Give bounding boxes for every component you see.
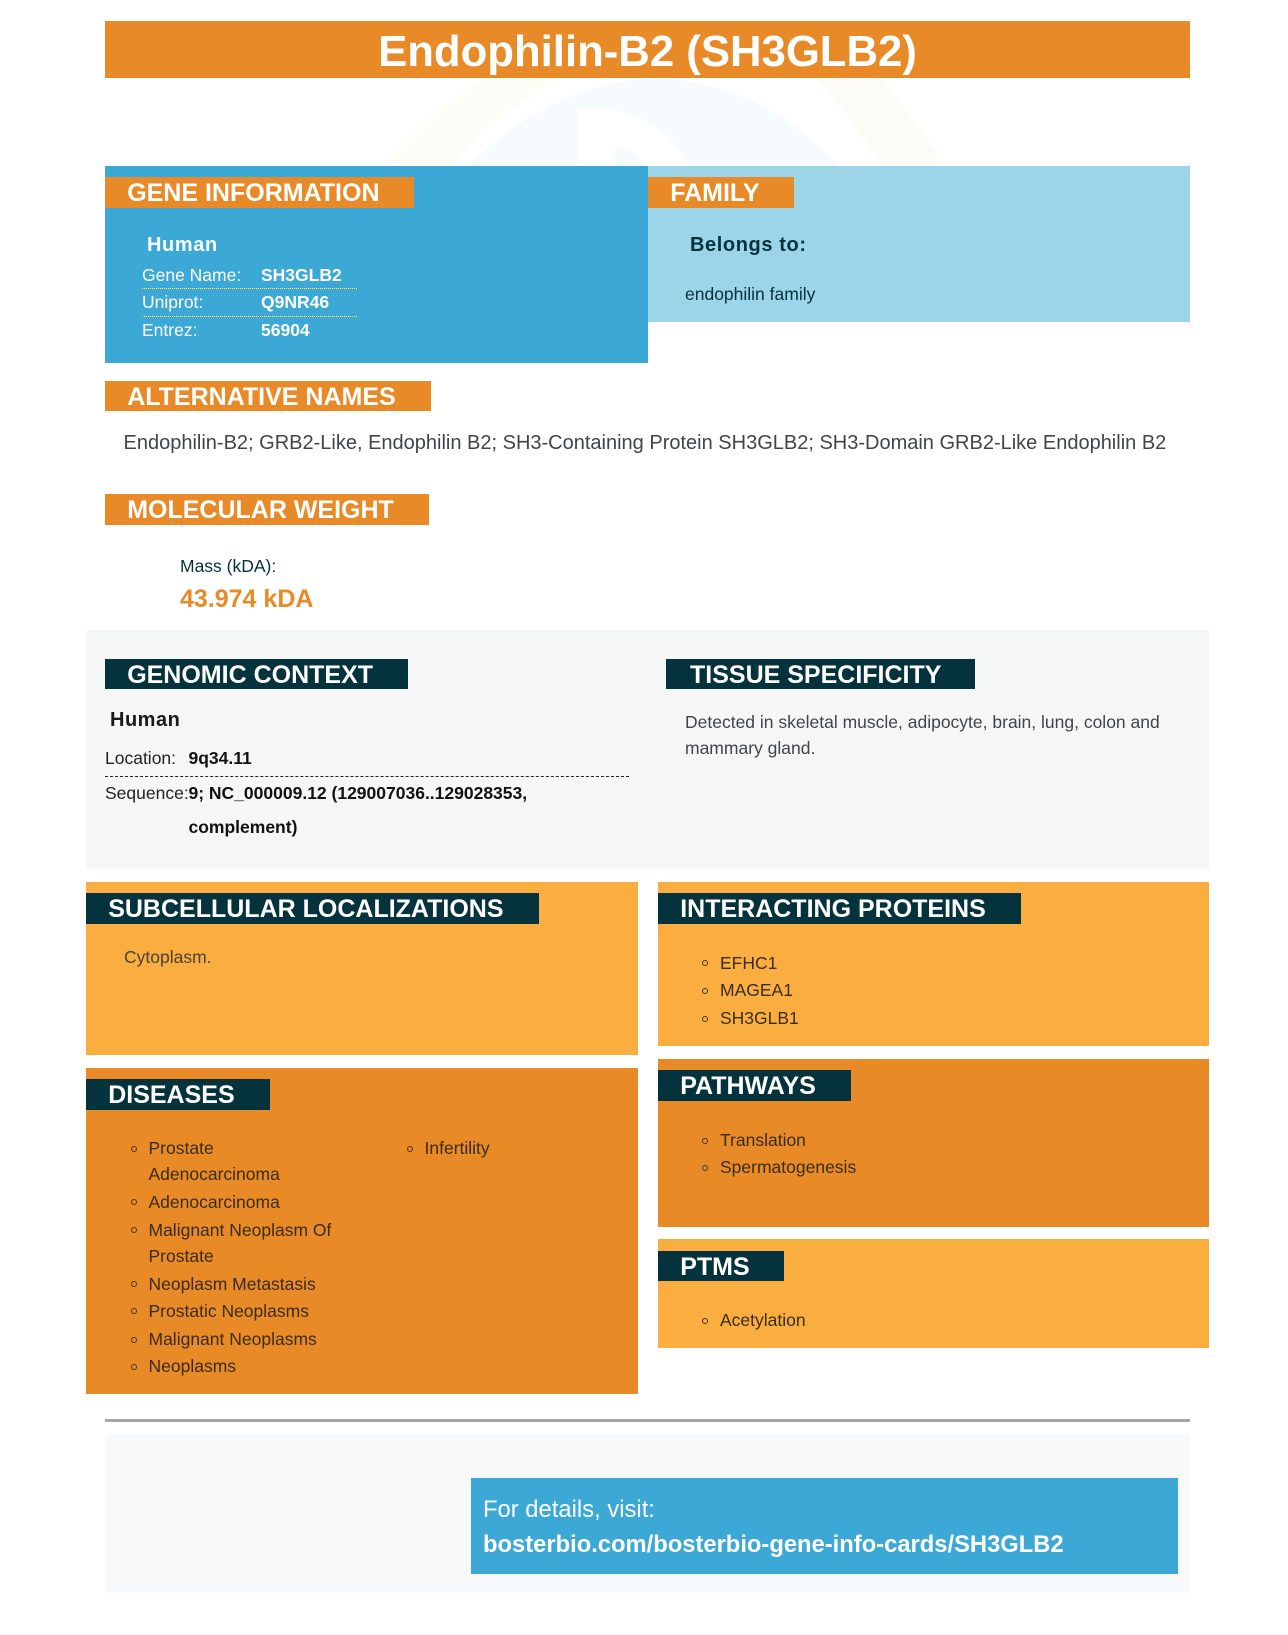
localization text: Cytoplasm. xyxy=(124,947,212,967)
disease list: Malignant Neoplasm Of xyxy=(148,1220,331,1240)
disease list: Adenocarcinoma xyxy=(148,1164,280,1184)
panel: footer xyxy=(105,1434,1190,1593)
sequence row xyxy=(105,783,527,837)
heading: tissue specificity: TISSUE SPECIFICITY xyxy=(690,661,941,689)
callout: details link xyxy=(471,1478,1178,1574)
heading: family: FAMILY xyxy=(670,179,760,207)
panel: diseases xyxy=(86,1068,638,1394)
alternative names text: Endophilin-B2; GRB2-Like, Endophilin B2; SH3-Containing Protein SH3GLB2; SH3-Domain GRB2-Like Endophilin B2 xyxy=(124,432,1166,454)
watermark logo xyxy=(467,78,944,166)
heading: subcellular localizations: SUBCELLULAR LOCALIZATIONS xyxy=(108,895,504,923)
title banner xyxy=(105,21,1190,78)
heading: diseases: DISEASES xyxy=(108,1081,235,1109)
heading: family xyxy=(648,177,794,208)
heading: alternative names: ALTERNATIVE NAMES xyxy=(127,383,396,411)
sequence row: complement) xyxy=(188,817,297,837)
pathway list: Translation xyxy=(720,1130,806,1150)
gene identifiers table: Gene Name: xyxy=(142,265,241,285)
family name: endophilin family xyxy=(685,284,815,304)
protein list: EFHC1 xyxy=(720,952,777,972)
heading: ptms xyxy=(658,1251,784,1281)
tissue specificity text: mammary gland. xyxy=(685,738,815,758)
panel: subcellular localizations xyxy=(86,882,638,1055)
panel: family xyxy=(648,166,1190,322)
sequence row: 9; NC_000009.12 (129007036..129028353, xyxy=(188,783,527,803)
callout url: bosterbio.com/bosterbio-gene-info-cards/SH3GLB2 xyxy=(483,1531,1064,1558)
heading: pathways: PATHWAYS xyxy=(680,1072,816,1100)
panel: pathways xyxy=(658,1059,1209,1227)
location row: 9q34.11 xyxy=(188,748,252,768)
tissue specificity text xyxy=(685,712,1160,758)
mass value: 43.974 kDA xyxy=(180,585,313,613)
heading: gene information: GENE INFORMATION xyxy=(127,179,380,207)
disease list: Malignant Neoplasms xyxy=(148,1329,317,1349)
gene identifiers table: Q9NR46 xyxy=(261,292,329,312)
disease list xyxy=(131,1138,490,1376)
protein list: SH3GLB1 xyxy=(720,1008,799,1028)
species label: Human xyxy=(147,234,218,256)
ptm list: Acetylation xyxy=(720,1310,806,1330)
panel: ptms xyxy=(658,1239,1209,1348)
disease list: Adenocarcinoma xyxy=(148,1192,280,1212)
disease list: Neoplasm Metastasis xyxy=(148,1274,316,1294)
heading: pathways xyxy=(658,1070,851,1101)
heading: ptms: PTMS xyxy=(680,1253,750,1281)
heading: genomic context: GENOMIC CONTEXT xyxy=(127,661,373,689)
heading: interacting proteins: INTERACTING PROTEINS xyxy=(680,895,986,923)
location row xyxy=(105,750,629,777)
disease list: Prostate xyxy=(148,1138,214,1158)
gene identifiers table: SH3GLB2 xyxy=(261,265,342,285)
location row: Location: xyxy=(105,748,176,768)
heading: molecular weight: MOLECULAR WEIGHT xyxy=(127,496,394,524)
pathway list: Spermatogenesis xyxy=(720,1157,856,1177)
disease list: Neoplasms xyxy=(148,1356,236,1376)
protein list: MAGEA1 xyxy=(720,980,793,1000)
panel: genomic context and tissue specificity xyxy=(86,630,1209,869)
panel: interacting proteins xyxy=(658,882,1209,1046)
species label: Human xyxy=(110,709,180,731)
panel: gene information xyxy=(105,166,648,363)
protein list xyxy=(702,952,799,1028)
gene identifiers table: Uniprot: xyxy=(142,292,203,312)
tissue specificity text: Detected in skeletal muscle, adipocyte, brain, lung, colon and xyxy=(685,712,1160,732)
mass label: Mass (kDA): xyxy=(180,556,276,576)
belongs to label: Belongs to: xyxy=(690,234,807,256)
sequence row: Sequence: xyxy=(105,783,189,803)
disease list: Prostatic Neoplasms xyxy=(148,1300,309,1320)
gene identifiers table: Entrez: xyxy=(142,320,197,340)
disease list: Infertility xyxy=(424,1138,490,1158)
title banner: Endophilin-B2 (SH3GLB2) xyxy=(378,27,917,76)
gene identifiers table: 56904 xyxy=(261,320,310,340)
heading: diseases xyxy=(86,1079,270,1110)
gene identifiers table xyxy=(142,265,357,340)
callout intro text: For details, visit: xyxy=(483,1496,655,1523)
disease list: Prostate xyxy=(148,1246,214,1266)
pathway list xyxy=(702,1130,856,1177)
